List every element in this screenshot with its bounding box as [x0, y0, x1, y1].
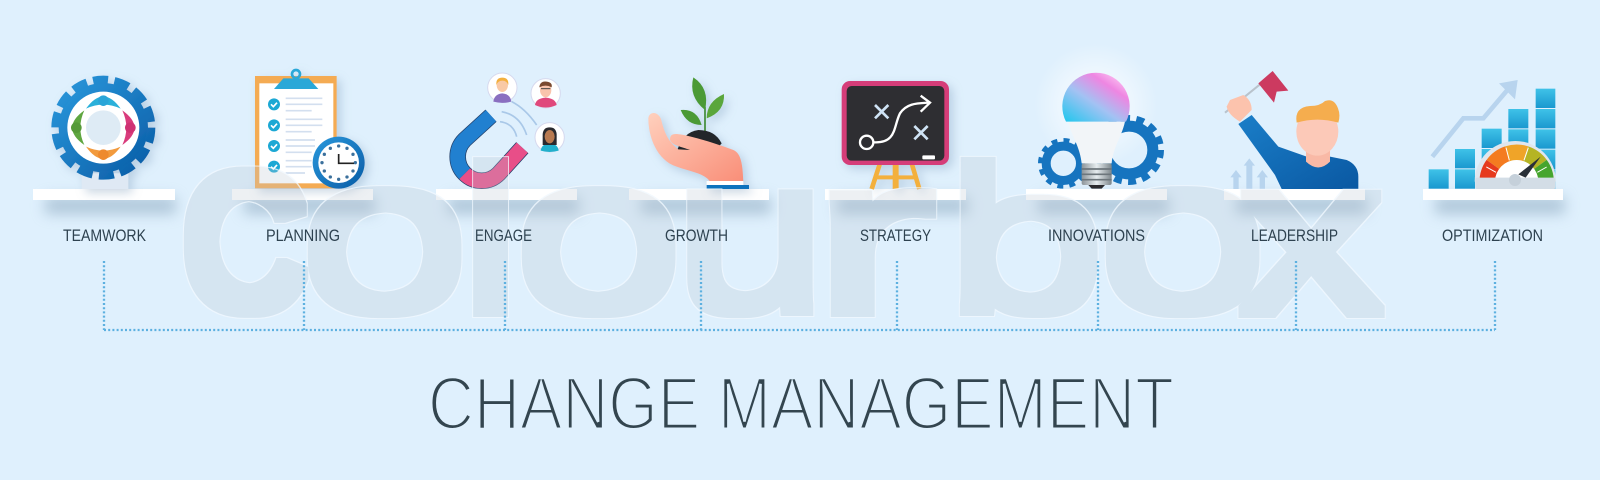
labels: [63, 227, 1543, 245]
panel: planning: [232, 70, 375, 214]
panel: engage: [436, 73, 579, 214]
title: CHANGE MANAGEMENT: [428, 362, 1174, 445]
labels: INNOVATIONS: [1048, 227, 1145, 245]
watermark: b: [946, 127, 1105, 354]
watermark: x: [1240, 114, 1383, 359]
watermark: o: [514, 113, 683, 357]
labels: STRATEGY: [860, 227, 931, 245]
panel: leadership: [1224, 71, 1367, 214]
labels: LEADERSHIP: [1251, 227, 1338, 245]
watermark: l: [459, 127, 522, 355]
watermark: [182, 113, 1383, 359]
panel: growth: [629, 77, 771, 214]
icon: magnet attracting people: [458, 73, 564, 181]
watermark: C: [182, 131, 308, 352]
icon: leader raising flag: [1225, 71, 1358, 189]
panel: innovations: [1026, 43, 1169, 214]
labels: TEAMWORK: [63, 227, 146, 245]
icon: light bulb and gears: [1034, 43, 1161, 189]
icon: hand holding plant: [648, 77, 749, 189]
icon: blackboard on easel: [842, 81, 949, 189]
watermark: o: [300, 113, 469, 357]
watermark: r: [809, 115, 938, 357]
connector: dotted lines: [104, 261, 1495, 330]
panel: optimization: [1423, 80, 1565, 214]
panel: strategy: [825, 81, 968, 214]
icon: teamwork gear: [56, 80, 151, 189]
labels: OPTIMIZATION: [1442, 227, 1543, 245]
watermark: u: [674, 115, 827, 357]
labels: GROWTH: [665, 227, 728, 245]
watermark: o: [1098, 113, 1267, 357]
icon: clipboard and clock: [255, 70, 365, 189]
panel: teamwork: [33, 80, 176, 214]
labels: ENGAGE: [475, 227, 532, 245]
icon: rising bars, arrow and gauge: [1429, 80, 1556, 189]
labels: PLANNING: [266, 227, 340, 245]
